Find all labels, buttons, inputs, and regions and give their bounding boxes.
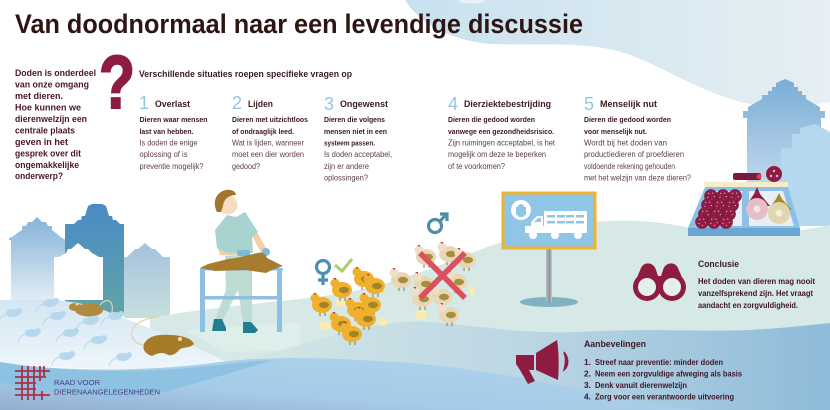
- panel: 4 Dierziektebestrijding: [448, 94, 556, 171]
- icon: binoculars: [633, 263, 686, 301]
- shells: [415, 286, 475, 320]
- panel: 5 Menselijk nut: met het welzijn van deze dieren?: [584, 174, 692, 182]
- illustration: roosters group crossed out: [390, 214, 476, 326]
- background: pale spot at top: [458, 0, 486, 4]
- icon: megaphone: [516, 340, 568, 384]
- female symbol: [316, 260, 330, 285]
- icon: stop hand: [511, 200, 531, 220]
- panel: 2 Lijden: gedood?: [232, 162, 261, 171]
- panel: 5 Menselijk nut: voldoende rekening gehouden: [584, 162, 675, 171]
- text: aanbevelingen: Neem een zorgvuldige afweging als basis: [595, 368, 742, 378]
- text: aanbevelingen: 2.: [584, 368, 591, 378]
- shoes: [212, 319, 258, 333]
- background: light floor patch: [185, 322, 300, 352]
- panel: 5 Menselijk nut: Menselijk nut: [600, 98, 657, 109]
- background: left houses: [9, 204, 170, 318]
- background: darker blue wave tapering right: [0, 360, 272, 397]
- background: lower blue hill: [0, 358, 700, 410]
- table: [200, 268, 283, 332]
- panel: 2 Lijden: [232, 93, 308, 171]
- illustration: hens group: [310, 259, 388, 345]
- panel: 4 Dierziektebestrijding: vanwege een gezondheidsrisico.: [448, 127, 554, 136]
- intro text: geven in het: [15, 136, 68, 147]
- panel: 1 Overlast: Dieren waar mensen: [140, 115, 208, 124]
- shells: [319, 299, 388, 331]
- panel: 2 Lijden: of ondraaglijk leed.: [232, 127, 294, 136]
- text: conclusie: Het doden van dieren mag nooit: [698, 276, 815, 286]
- panel: 2 Lijden: moet een dier worden: [232, 150, 304, 159]
- text: aanbevelingen: 3.: [584, 380, 591, 390]
- panel: 4 Dierziektebestrijding: Zijn ruimingen acceptabel, is het: [448, 138, 556, 148]
- panel: 4 Dierziektebestrijding: of te voorkomen?: [448, 162, 506, 171]
- panel: 5 Menselijk nut: [584, 94, 692, 182]
- intro text: ongemakkelijke: [15, 159, 79, 170]
- background: green hill: [150, 221, 830, 380]
- text: aanbevelingen: Zorg voor een verantwoorde uitvoering: [595, 392, 734, 402]
- panel: 4 Dierziektebestrijding: Dieren die gedood worden: [448, 115, 535, 124]
- panel: 3 Ongewenst: Ongewenst: [340, 98, 388, 109]
- panel: 5 Menselijk nut: Wordt bij het doden van: [584, 138, 667, 148]
- illustration: large brown rat: [132, 316, 194, 356]
- text: aanbevelingen: 1.: [584, 357, 591, 367]
- icon: truck: [525, 211, 587, 239]
- panel: 5 Menselijk nut: Dieren die gedood worden: [584, 115, 671, 124]
- illustration: road sign with truck: [503, 193, 595, 307]
- intro text: Doden is onderdeel: [15, 67, 96, 78]
- panel: 2 Lijden: Dieren met uitzichtloos: [232, 115, 308, 124]
- intro text: gesprek over dit: [15, 148, 81, 158]
- text: aanbevelingen: 4.: [584, 392, 591, 402]
- panel: 3 Ongewenst: oplossingen?: [324, 174, 369, 182]
- intro text: dierenwelzijn een: [15, 113, 87, 124]
- panel: 5 Menselijk nut: 5: [584, 94, 594, 114]
- illustration: small brown rat: [69, 301, 112, 316]
- panel: 3 Ongewenst: [324, 94, 392, 182]
- shelf: [704, 182, 788, 187]
- sausage: [733, 173, 762, 180]
- panel: 1 Overlast: Overlast: [155, 98, 190, 109]
- text: conclusie: vanzelfsprekend zijn. Het vraagt: [698, 288, 813, 298]
- panel: 2 Lijden: 2: [232, 93, 242, 113]
- panel: 4 Dierziektebestrijding: mogelijk om deze te beperken: [448, 150, 546, 159]
- panel: 1 Overlast: [139, 93, 208, 171]
- logo: Raad voor Dierenaangelegenheden: [15, 366, 160, 400]
- intro text: Hoe kunnen we: [15, 102, 81, 112]
- text: conclusie: aandacht en zorgvuldigheid.: [698, 300, 798, 310]
- panel: 4 Dierziektebestrijding: Dierziektebestrijding: [464, 98, 551, 109]
- panel: 3 Ongewenst: mensen niet in een: [324, 127, 387, 136]
- check mark: [335, 259, 352, 271]
- panel: 3 Ongewenst: zijn er andere: [324, 162, 370, 171]
- panel: 2 Lijden: Lijden: [248, 98, 273, 109]
- panel: 4 Dierziektebestrijding: 4: [448, 94, 458, 114]
- salami slice: [766, 166, 782, 182]
- panel: 3 Ongewenst: Dieren die volgens: [324, 115, 385, 124]
- pale chicks: [390, 242, 476, 326]
- intro text: onderwerp?: [15, 170, 63, 181]
- trousers: [215, 256, 252, 322]
- salami slices: [695, 189, 742, 229]
- background: houses right: [743, 79, 830, 226]
- background: top sky wave: [405, 0, 830, 107]
- illustration: rats on mound: [0, 298, 132, 366]
- male symbol: [428, 214, 447, 232]
- panel: 1 Overlast: Is doden de enige: [140, 138, 198, 148]
- heading: situations: Verschillende situaties roepen specifieke vragen op: [139, 68, 352, 79]
- text: conclusie: [698, 258, 815, 310]
- panel: 3 Ongewenst: Is doden acceptabel,: [324, 150, 392, 159]
- panel: 1 Overlast: oplossing of is: [140, 150, 188, 159]
- head and hair: [215, 190, 238, 214]
- illustration: vet with dog on table: [200, 190, 283, 333]
- text: conclusie: Conclusie: [698, 258, 739, 269]
- text: aanbevelingen: Denk vanuit dierenwelzijn: [595, 380, 687, 390]
- intro text: centrale plaats: [15, 124, 75, 136]
- title: Van doodnormaal naar een levendige discussie: [15, 9, 583, 39]
- logo: Raad voor Dierenaangelegenheden: DIERENAANGELEGENHEDEN: [54, 388, 160, 396]
- illustration: meat counter: [688, 166, 800, 236]
- dog: [200, 252, 283, 273]
- intro text: van onze omgang: [15, 78, 89, 90]
- panel: 3 Ongewenst: 3: [324, 94, 334, 114]
- cheese sausage: [768, 193, 792, 224]
- panel: 5 Menselijk nut: productiedieren of proefdieren: [584, 150, 684, 159]
- arms: [217, 232, 267, 256]
- background: mound with rats: [0, 299, 228, 369]
- tray: [688, 187, 800, 236]
- icon: question mark: ?: [99, 40, 135, 124]
- yellow chicks: [310, 267, 385, 345]
- logo: Raad voor Dierenaangelegenheden: RAAD VOOR: [54, 378, 100, 387]
- gloves: [237, 248, 270, 256]
- panel: 5 Menselijk nut: voor menselijk nut.: [584, 127, 647, 136]
- shirt: [215, 212, 258, 253]
- panel: 3 Ongewenst: systeem passen.: [324, 138, 375, 148]
- panel: 1 Overlast: preventie mogelijk?: [140, 162, 204, 171]
- text: aanbevelingen: Streef naar preventie: minder doden: [595, 357, 723, 367]
- panel: 1 Overlast: last van hebben.: [140, 127, 194, 136]
- panel: 1 Overlast: 1: [139, 93, 149, 113]
- text: aanbevelingen: [584, 338, 742, 402]
- text: aanbevelingen: Aanbevelingen: [584, 338, 646, 349]
- red cross: [420, 253, 465, 298]
- intro text: met dieren.: [15, 90, 63, 101]
- panel: 2 Lijden: Wat is lijden, wanneer: [232, 138, 304, 148]
- background: bluish band: [220, 322, 830, 410]
- intro text: [15, 67, 96, 181]
- ham: [746, 187, 770, 220]
